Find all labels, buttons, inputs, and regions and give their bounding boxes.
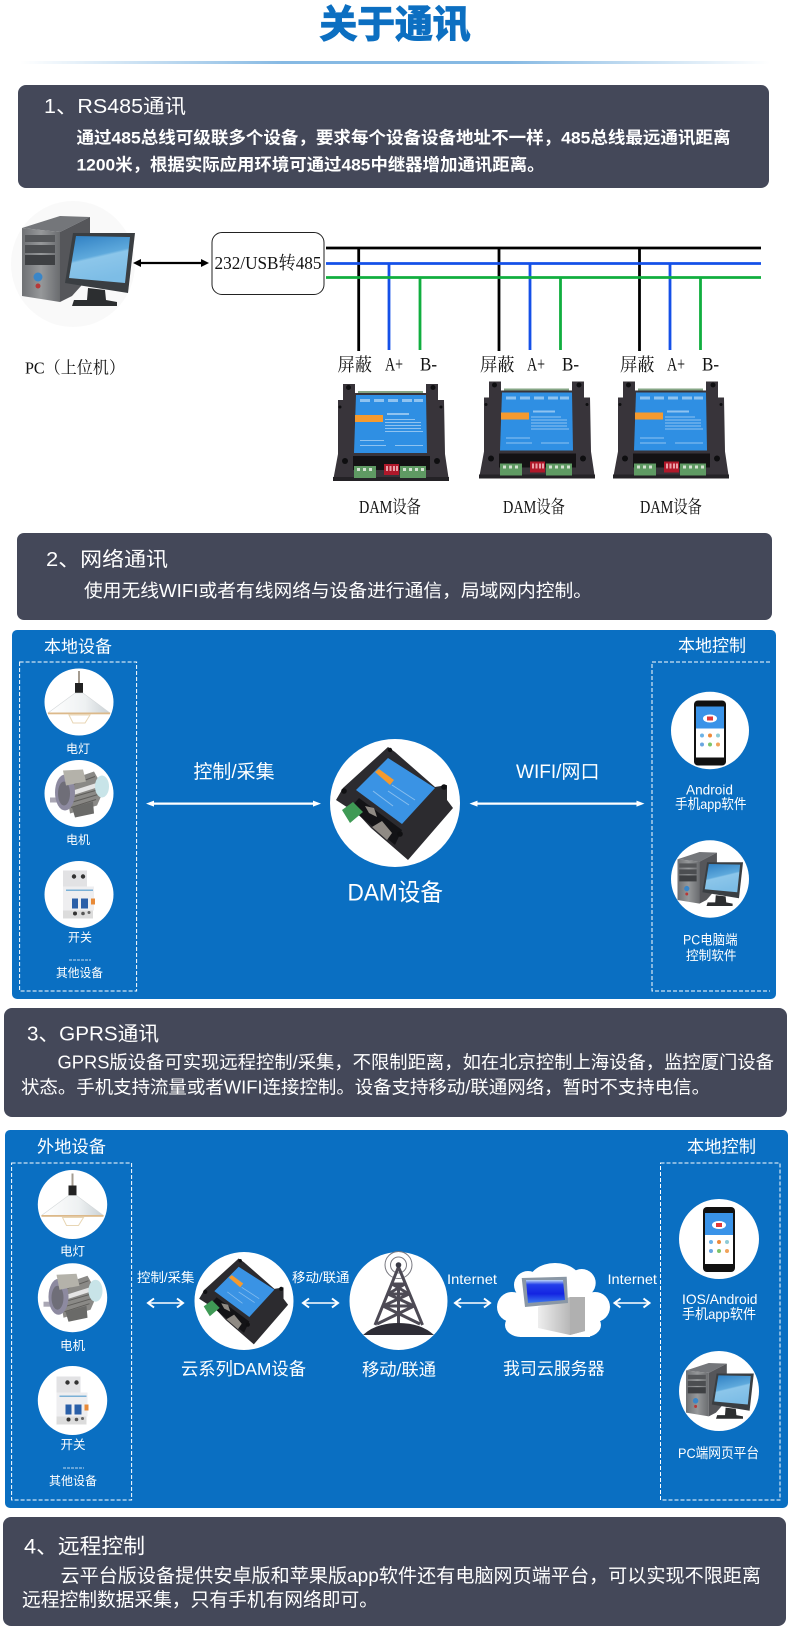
label: PC software: PC电脑端 <box>683 932 738 948</box>
icon: switch <box>44 861 114 928</box>
label: iOS and Android app: 手机app软件 <box>682 1306 756 1322</box>
panel: RS485 description <box>18 85 769 188</box>
icon: cell tower <box>350 1252 448 1350</box>
label: our cloud server: 我司云服务器 <box>503 1360 604 1378</box>
label: mobile and unicom tower: 移动/联通 <box>362 1360 436 1380</box>
terminal labels: A+ <box>667 354 685 376</box>
text block: RS485: 通过485总线可级联多个设备，要求每个设备设备地址不一样，485总线最远通讯距离 <box>76 128 730 148</box>
arrow: devices to DAM <box>148 1298 183 1308</box>
heading: remote control: 4、远程控制 <box>24 1536 145 1558</box>
device labels: DAM设备 <box>640 497 702 517</box>
text block: GPRS: 状态。手机支持流量或者WIFI连接控制。设备支持移动/联通网络，暂时不支持电信。 <box>21 1078 710 1098</box>
icon: PC host <box>11 201 135 327</box>
label: Internet right: Internet <box>608 1271 657 1287</box>
label: cloud DAM device: 云系列DAM设备 <box>181 1359 306 1379</box>
arrow: cloud to control <box>614 1298 650 1308</box>
text block: remote control <box>22 1565 761 1611</box>
icon: phone <box>679 1199 759 1279</box>
terminal labels: 屏蔽 <box>338 355 372 375</box>
label: iOS and Android app: IOS/Android <box>682 1291 758 1307</box>
device labels <box>359 497 702 517</box>
label: other devices: 其他设备 <box>49 1474 97 1488</box>
label: DAM device: DAM设备 <box>348 880 443 906</box>
icon: PC <box>679 1351 759 1431</box>
group: remote devices <box>12 1163 132 1500</box>
text block: network: 使用无线WIFI或者有线网络与设备进行通信，局域网内控制。 <box>84 581 592 601</box>
text block: remote control: 云平台版设备提供安卓版和苹果版app软件还有电脑网页端平台，可以实现不限距离 <box>60 1565 761 1587</box>
label: PC host: PC（上位机） <box>25 358 125 378</box>
label: Android app: 手机app软件 <box>675 796 746 812</box>
icon: switch <box>38 1366 107 1435</box>
icon: motor <box>38 1263 107 1332</box>
arrow: PC to converter <box>133 259 209 267</box>
arrow: DAM to control <box>470 801 644 807</box>
heading: GPRS: 3、GPRS通讯 <box>27 1022 159 1046</box>
label: PC software: 控制软件 <box>686 948 736 963</box>
terminal labels: B- <box>420 354 437 376</box>
icon: cloud DAM device <box>194 1252 294 1350</box>
heading: local control: 本地控制 <box>678 636 746 656</box>
heading: local control: 本地控制 <box>687 1138 756 1156</box>
panel: GPRS description <box>4 1008 787 1117</box>
label: lamp: 电灯 <box>60 1245 85 1259</box>
arrow: tower to cloud <box>455 1298 490 1308</box>
terminal labels: B- <box>562 354 579 376</box>
icon: cloud server <box>497 1263 610 1337</box>
group: local devices <box>20 662 137 991</box>
label: motor: 电机 <box>60 1339 86 1353</box>
group: local control <box>660 1163 780 1500</box>
icon: motor <box>44 760 114 827</box>
icon: DAM device 1 <box>333 384 449 481</box>
panel: network description <box>17 533 772 620</box>
label: mobile and unicom: 移动/联通 <box>292 1270 350 1285</box>
diagram: RS485 wiring <box>11 201 761 517</box>
icon: lamp <box>38 1170 107 1239</box>
converter box <box>212 232 324 294</box>
terminal labels: A+ <box>385 354 403 376</box>
arrow: DAM to tower <box>303 1298 338 1308</box>
text block: remote control: 远程控制数据采集，只有手机有网络即可。 <box>22 1589 378 1611</box>
label: Android app: Android <box>686 782 733 798</box>
label: switch: 开关 <box>68 930 92 944</box>
converter box: 232/USB转485 <box>214 253 322 273</box>
panel: local network diagram <box>12 630 776 999</box>
label: motor: 电机 <box>66 833 90 847</box>
label: Internet left: Internet <box>447 1271 497 1287</box>
panel: GPRS cloud diagram <box>5 1130 788 1508</box>
terminal labels: 屏蔽 <box>480 355 514 375</box>
device labels: DAM设备 <box>503 497 565 517</box>
heading: remote devices: 外地设备 <box>37 1138 106 1156</box>
label: WIFI and network port: WIFI/网口 <box>516 762 600 783</box>
label: PC software <box>683 932 738 963</box>
text block: RS485 <box>76 128 730 174</box>
heading: local devices: 本地设备 <box>44 638 112 656</box>
terminal labels: B- <box>702 354 719 376</box>
text block: GPRS <box>21 1053 774 1098</box>
terminal labels: A+ <box>527 354 545 376</box>
icon: phone <box>671 692 749 769</box>
group: local control <box>652 662 770 991</box>
label: lamp: 电灯 <box>66 742 90 756</box>
label: control and acquisition: 控制/采集 <box>137 1270 194 1285</box>
heading: network: 2、网络通讯 <box>46 548 168 571</box>
label: iOS and Android app <box>682 1291 758 1322</box>
terminal labels: 屏蔽 <box>620 355 654 375</box>
title: 关于通讯 <box>320 4 470 46</box>
label: Android app <box>675 782 746 812</box>
icon: PC <box>671 840 749 918</box>
heading: RS485: 1、RS485通讯 <box>44 95 186 118</box>
arrow: devices to DAM <box>146 801 321 807</box>
icon: DAM device 3 <box>613 382 729 478</box>
label: control and acquisition: 控制/采集 <box>194 761 274 783</box>
text block: RS485: 1200米，根据实际应用环境可通过485中继器增加通讯距离。 <box>76 154 544 174</box>
bus lines <box>326 248 761 351</box>
device labels: DAM设备 <box>359 497 421 517</box>
text block: GPRS: GPRS版设备可实现远程控制/采集，不限制距离，如在北京控制上海设备，监控厦门设备 <box>58 1053 774 1073</box>
panel: remote control description <box>3 1517 786 1626</box>
label: switch: 开关 <box>60 1438 86 1452</box>
icon: lamp <box>44 668 114 736</box>
icon: DAM device <box>330 739 460 867</box>
icon: DAM device 2 <box>479 382 595 478</box>
terminal labels <box>338 354 719 376</box>
label: other devices: 其他设备 <box>56 966 103 980</box>
label: PC web platform: PC端网页平台 <box>678 1445 759 1461</box>
